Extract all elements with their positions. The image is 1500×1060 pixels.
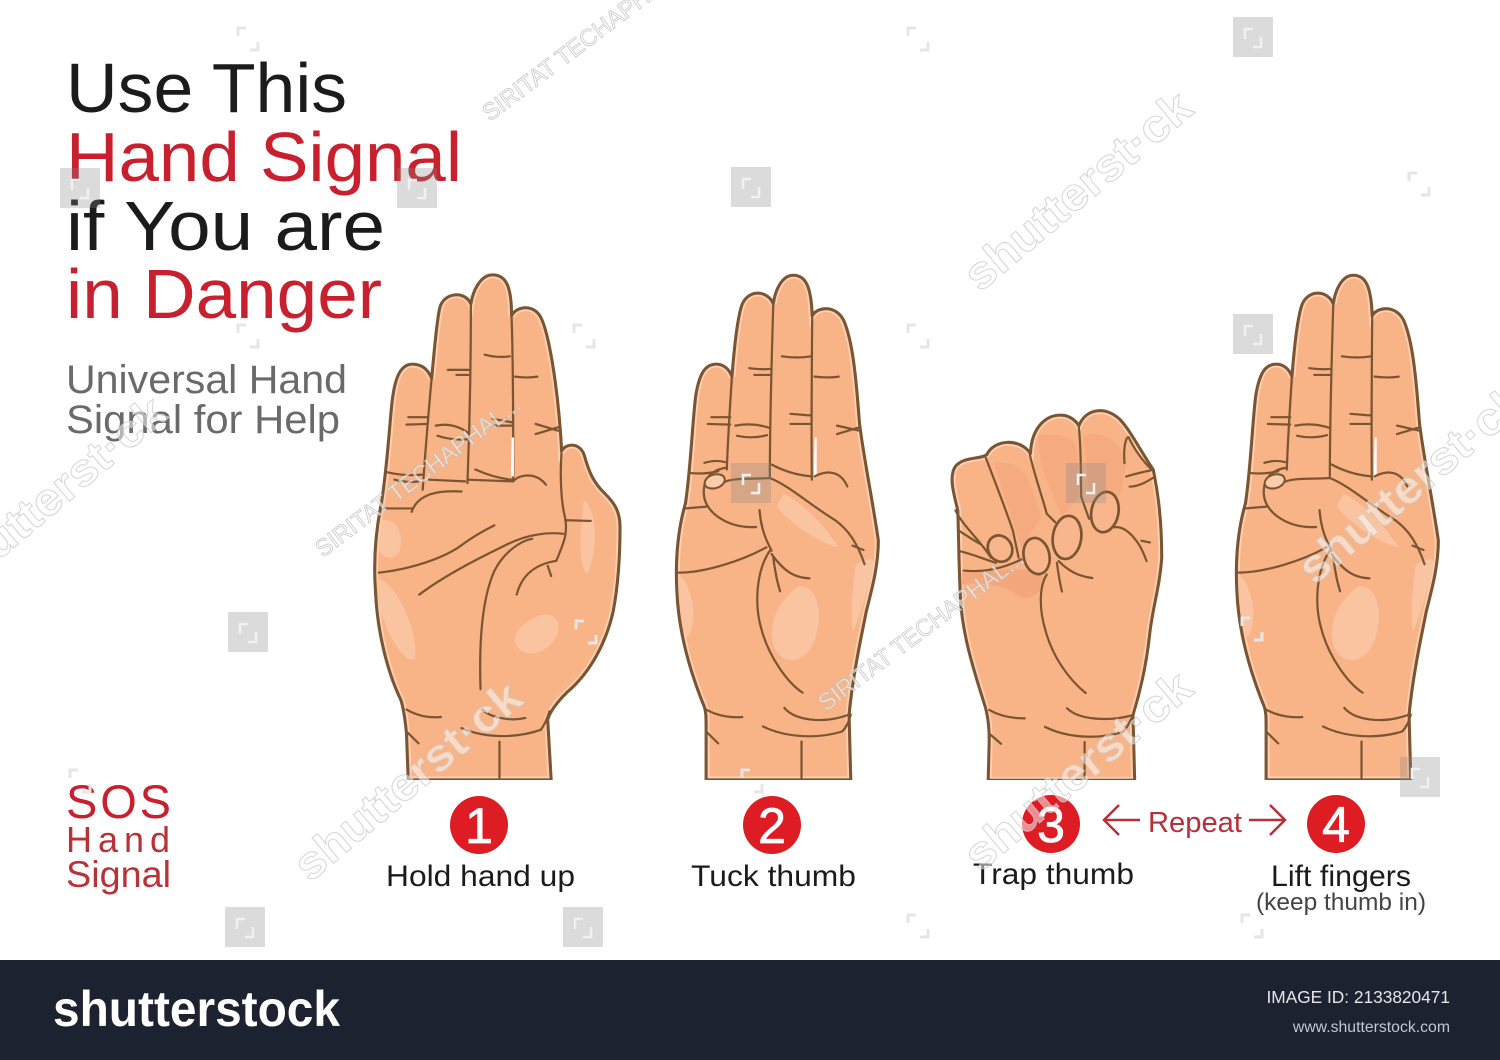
title: Hand Signal	[66, 118, 462, 196]
step 3: Trap thumb	[973, 858, 1134, 891]
SOS hand signal label: Signal	[66, 854, 171, 895]
step 1: 1	[465, 798, 493, 854]
step 1	[386, 796, 575, 893]
footer url: www.shutterstock.com	[1292, 1019, 1450, 1036]
hand 4: fingers lifted	[1236, 275, 1438, 780]
hand 3: fist trapping thumb	[952, 411, 1162, 780]
subtitle	[66, 358, 347, 442]
step 3	[973, 795, 1134, 891]
title: Use This	[66, 49, 347, 127]
title: in Danger	[66, 255, 382, 333]
repeat arrows: Repeat	[1148, 807, 1242, 839]
step 4	[1256, 795, 1426, 916]
step 2: 2	[758, 798, 786, 854]
fist lines	[955, 427, 1155, 780]
watermark: shutterst·ck	[953, 80, 1202, 301]
palm lines	[379, 304, 591, 780]
step 3: 3	[1037, 797, 1065, 853]
repeat arrows	[1104, 805, 1285, 839]
watermark: shutterst·ck	[953, 660, 1202, 881]
hand 1: open palm	[375, 275, 620, 780]
step 4: 4	[1322, 797, 1350, 853]
fingertips	[983, 490, 1122, 577]
hand 2: thumb tucked	[676, 275, 878, 780]
subtitle: Universal Hand	[66, 358, 347, 402]
watermark: SIRITAT TECHAPHAL...	[813, 545, 1029, 717]
title: if You are	[66, 187, 385, 265]
step 4: Lift fingers	[1271, 860, 1411, 893]
step 4: (keep thumb in)	[1256, 889, 1426, 916]
SOS hand signal label	[66, 775, 171, 895]
SOS hand signal label: SOS	[66, 775, 171, 828]
watermark: shutterst·ck	[283, 670, 532, 891]
watermark: SIRITAT TECHAPHAL...	[310, 391, 526, 563]
title	[66, 49, 462, 333]
step 1: Hold hand up	[386, 860, 575, 893]
footer logo: shutterstock	[53, 981, 340, 1037]
subtitle: Signal for Help	[66, 398, 340, 442]
wrist crop mask	[360, 780, 1450, 786]
footer image id: IMAGE ID: 2133820471	[1266, 987, 1450, 1007]
SOS hand signal label: Hand	[66, 819, 170, 860]
footer bar	[0, 960, 1500, 1060]
step 2	[691, 796, 856, 893]
step 2: Tuck thumb	[691, 860, 856, 893]
